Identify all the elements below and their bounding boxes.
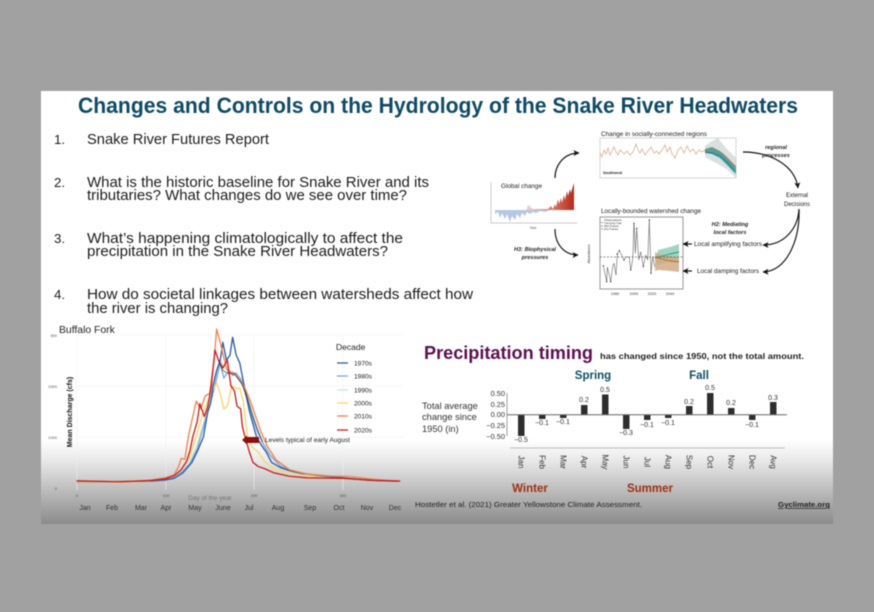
arrow: early August levels: [242, 436, 259, 444]
x axis ticks: 200: [251, 493, 258, 498]
diagram labels: regional: [765, 145, 787, 151]
legend: decade: 1980s: [354, 374, 373, 380]
numbered question list: What is the historic baseline for Snake River and its: [87, 175, 429, 191]
bar chart: monthly change: −0.3: [619, 430, 633, 437]
diagram labels: Decisions: [784, 202, 810, 208]
discharge line chart: Buffalo Fork: [48, 325, 403, 512]
month labels: May: [188, 505, 202, 512]
legend: decade: [336, 342, 373, 434]
bar chart: monthly change: Jul: [642, 457, 652, 467]
legend: decade: 1990s: [354, 388, 373, 394]
bar chart: monthly change: −0.1: [535, 420, 549, 427]
bar chart: monthly change: Avg: [768, 455, 778, 469]
precipitation timing panel: [415, 343, 830, 509]
y axis title: Total average: [422, 401, 478, 411]
y axis label: Mean Discharge (cfs): [67, 377, 74, 447]
bar chart: monthly change: 0.3: [768, 395, 778, 402]
local watershed chart: Locally-bounded watershed change: [601, 208, 701, 215]
local watershed chart: Abundance: [587, 244, 591, 264]
regional change chart: [600, 131, 736, 178]
title: Changes and Controls on the Hydrology of the Snake River Headwaters: [78, 93, 798, 118]
chart heading: Buffalo Fork: [59, 325, 116, 336]
local watershed chart: Carrying Cap: [604, 221, 622, 225]
bar chart: monthly change: Aug: [664, 455, 672, 469]
month labels: June: [215, 505, 231, 512]
regional change chart: Southwest: [603, 171, 623, 175]
numbered question list: 4.: [54, 287, 65, 302]
bar chart: monthly change: Feb: [538, 455, 546, 469]
season labels: Spring: [575, 370, 611, 382]
numbered question list: tributaries? What changes do we see over time?: [87, 188, 407, 204]
bar chart: monthly change: 0.2: [684, 399, 694, 406]
numbered question list: How do societal linkages between watersheds affect how: [87, 287, 474, 303]
x axis ticks: 300: [340, 493, 347, 498]
local watershed chart: 2040: [666, 292, 674, 296]
local watershed chart: 2000: [630, 292, 638, 296]
bar chart: monthly change: Dec: [748, 455, 756, 469]
legend: decade: 1970s: [354, 360, 373, 368]
bar chart: monthly change: Nov: [726, 455, 736, 469]
month labels: Feb: [106, 505, 118, 512]
local watershed chart: [587, 208, 701, 296]
bar chart: monthly change: −0.1: [661, 420, 675, 427]
bar chart: monthly change: −0.5: [514, 437, 528, 444]
x axis ticks: 0: [76, 493, 79, 498]
bar chart: monthly change: Jan: [516, 456, 526, 468]
slide background: [41, 91, 833, 524]
month labels: Oct: [334, 505, 344, 512]
numbered question list: What’s happening climatologically to affect the: [87, 231, 403, 247]
legend: decade: Decade: [336, 342, 366, 352]
month labels: [79, 505, 402, 512]
bar chart: monthly change: 0.2: [726, 400, 736, 407]
legend: decade: 2020s: [354, 428, 373, 434]
diagram arrows: [555, 152, 799, 272]
bar chart: monthly change: Jun: [622, 456, 630, 468]
season labels: Summer: [627, 483, 674, 495]
chart grid: [77, 335, 403, 490]
diagram labels: H2: Mediating: [712, 222, 749, 228]
discharge curves by decade: [77, 329, 400, 482]
diagram labels: Local damping factors: [697, 268, 759, 275]
bar chart: monthly change: [486, 385, 787, 470]
month labels: Aug: [272, 505, 284, 512]
x axis ticks: [76, 493, 347, 498]
source citation: Hostetler et al. (2021) Greater Yellowstone Climate Assessment.: [415, 500, 642, 509]
global change chart: Year: [529, 226, 537, 230]
bar chart: monthly change: Sep: [684, 455, 694, 470]
season labels: Fall: [689, 370, 709, 382]
y axis title: 1950 (in): [422, 424, 459, 434]
local watershed chart: Dry Future: [604, 227, 619, 231]
global change chart: [491, 182, 577, 230]
diagram labels: local factors: [714, 230, 746, 236]
local watershed chart: Wet Future: [604, 224, 619, 228]
month labels: Jan: [79, 505, 91, 512]
numbered question list: precipitation in the Snake River Headwaters?: [87, 244, 388, 260]
local watershed chart: 2020: [648, 292, 656, 296]
bar chart: monthly change: 0.00: [491, 410, 505, 419]
x axis label: Day of the year: [188, 495, 233, 502]
y axis title: change since: [422, 412, 477, 422]
global change chart: Global change: [501, 183, 542, 190]
season labels: Winter: [512, 483, 548, 495]
bar chart: monthly change: May: [600, 454, 610, 470]
bar chart: monthly change: −0.1: [745, 422, 759, 429]
diagram labels: [514, 145, 810, 275]
panel subheading: has changed since 1950, not the total amount.: [600, 351, 804, 361]
numbered question list: Snake River Futures Report: [87, 132, 269, 148]
website credit: Gyclimate.org: [778, 500, 830, 509]
bar chart: monthly change: Mar: [558, 455, 568, 469]
numbered question list: the river is changing?: [87, 301, 228, 317]
conceptual diagram: global to local change: [491, 131, 810, 296]
bar chart: monthly change: −0.1: [640, 422, 654, 429]
diagram labels: External: [786, 193, 808, 199]
diagram labels: H3: Biophysical: [514, 247, 556, 253]
bar chart: monthly change: Apr: [580, 456, 588, 469]
month labels: Mar: [135, 505, 148, 512]
numbered question list: [54, 132, 474, 317]
y axis title: [422, 401, 478, 434]
legend: decade: 2010s: [354, 414, 373, 420]
legend: decade: 2000s: [354, 400, 373, 408]
numbered question list: 1.: [54, 132, 65, 147]
local watershed chart: Observations: [604, 218, 622, 222]
month labels: Sep: [304, 505, 316, 512]
y axis ticks: 0: [55, 486, 58, 491]
bar chart: monthly change: 0.2: [579, 397, 589, 404]
regional change chart: Change in socially-connected regions: [601, 131, 707, 138]
diagram labels: Local amplifying factors: [694, 241, 762, 248]
callout: Levels typical of early August: [265, 438, 350, 444]
bar chart: monthly change: Oct: [706, 456, 714, 469]
diagram labels: pressures: [521, 255, 548, 261]
month labels: Apr: [161, 505, 172, 512]
panel heading: Precipitation timing: [424, 343, 593, 363]
y axis ticks: 300: [50, 333, 58, 338]
bar chart: monthly change: 0.50: [491, 389, 505, 398]
bar chart: monthly change: 0.5: [600, 387, 610, 394]
month labels: Nov: [361, 505, 374, 512]
y axis ticks: [48, 333, 58, 491]
numbered question list: 2.: [54, 175, 65, 190]
numbered question list: 3.: [54, 231, 65, 246]
month labels: Dec: [389, 505, 402, 512]
bar chart: monthly change: −0.1: [556, 419, 570, 426]
season labels: [512, 370, 709, 495]
y axis ticks: 2000: [48, 384, 58, 389]
bar chart: monthly change: −0.50: [486, 432, 505, 441]
month labels: Jul: [245, 505, 254, 512]
bar chart: monthly change: 0.25: [491, 400, 505, 409]
local watershed chart: 1980: [611, 292, 619, 296]
y axis ticks: 1000: [48, 435, 58, 440]
x axis ticks: 100: [163, 493, 170, 498]
bar chart: monthly change: 0.5: [705, 385, 715, 392]
bar chart: monthly change: −0.25: [486, 421, 505, 430]
diagram labels: processes: [761, 153, 790, 159]
